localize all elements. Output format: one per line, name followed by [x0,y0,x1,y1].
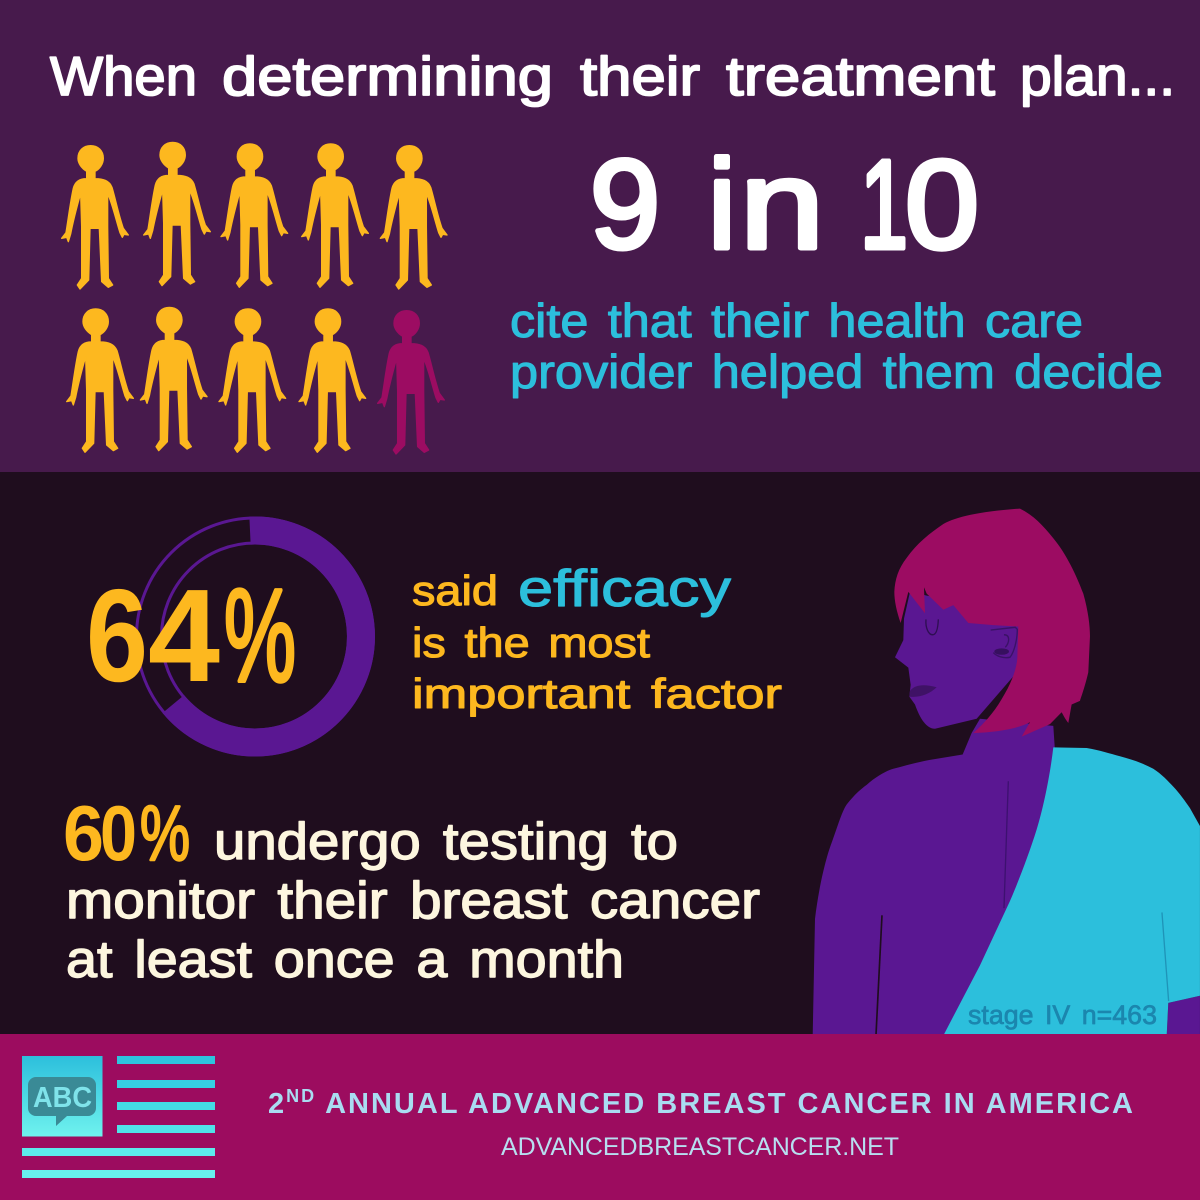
top garment [943,747,1200,1037]
panel: treatment plan decision [0,0,1200,472]
title: plan... [1020,45,1175,107]
body [813,719,1200,1037]
testing statistic: at least once a month [66,931,624,989]
testing statistic: % [140,789,190,877]
efficacy text [412,560,782,717]
efficacy text: is the most [412,619,650,666]
donut chart: 64% [136,518,374,755]
efficacy text: important factor [412,670,782,717]
title: determining [222,45,553,107]
percentage: 64%: % [224,562,296,709]
efficacy text: efficacy [518,560,731,618]
big statistic [590,134,979,275]
logo: ABC flag [22,1056,215,1178]
statistic description [510,294,1163,398]
big statistic: i [708,134,736,275]
lips [909,685,937,697]
percentage: 64% [86,562,296,709]
ear shadow [994,648,1009,655]
pictogram: 9 of 10 people [62,142,447,454]
big statistic: 9 [590,134,660,275]
big statistic: n [740,134,824,275]
title [50,45,1175,107]
percentage: 64%: 6 [86,562,148,709]
sample size note: stage IV n=463 [968,1000,1157,1030]
footer website: ADVANCEDBREASTCANCER.NET [501,1133,899,1161]
efficacy text: said [412,567,498,614]
facial and body details [876,619,1169,1035]
hair [894,509,1090,737]
panel: footer [0,1034,1200,1200]
testing statistic: 6 [63,789,104,877]
panel: efficacy and testing [0,472,1200,1037]
testing statistic: 0 [100,789,137,877]
big statistic: 0 [905,134,979,275]
big statistic: 1 [860,134,908,275]
footer title: 2 [268,1088,284,1120]
footer title: ND [286,1086,314,1106]
face [895,592,1020,729]
testing statistic: undergo testing to [214,813,678,871]
illustration: woman in profile [813,509,1200,1037]
testing statistic [63,789,760,989]
statistic description: provider helped them decide [510,345,1163,398]
statistic description: cite that their health care [510,294,1083,347]
footer title: ANNUAL ADVANCED BREAST CANCER IN AMERICA [316,1088,1133,1120]
title: their [580,45,700,107]
percentage: 64%: 4 [148,562,220,709]
title: When [50,45,197,107]
logo: ABC flag: ABC [33,1082,92,1114]
title: treatment [726,45,995,107]
testing statistic: monitor their breast cancer [66,872,760,930]
